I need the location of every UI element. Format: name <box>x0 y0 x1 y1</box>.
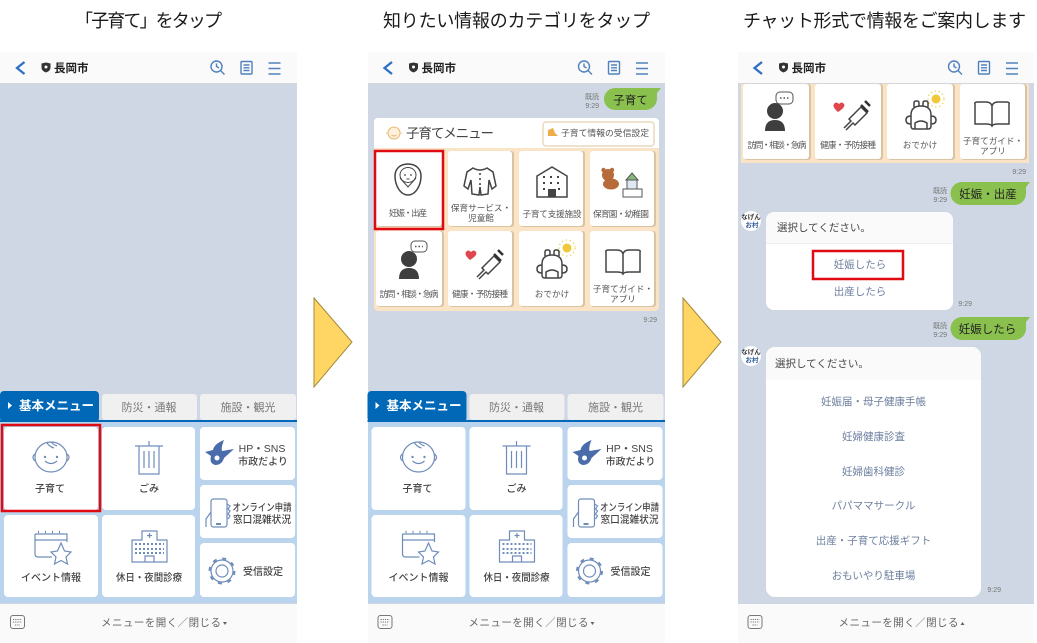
user bubble: 妊娠・出産 <box>933 182 1030 205</box>
arrow: step 2 to step 3 <box>683 298 721 387</box>
card heading: 子育てメニュー <box>406 126 494 141</box>
chat card: 選択してください 2: 選択してください。 <box>775 357 869 370</box>
user bubble: 子育て: 9:29 <box>585 103 599 110</box>
menu button: オンライン申請 窓口混雑状況: 窓口混雑状況 <box>233 513 291 526</box>
menu button: イベント情報 <box>372 515 466 597</box>
menu button: HP・SNS 市政だより <box>568 427 662 480</box>
phone 1 menu tabs: 防災・通報 <box>122 400 176 414</box>
category: 保育園・幼稚園: 保育園・幼稚園 <box>593 208 649 219</box>
user bubble: 妊娠・出産: 既読 <box>933 186 947 195</box>
chat card: 選択してください 1: 出産したら <box>834 285 886 298</box>
category: 健康・予防接種: 健康・予防接種 <box>820 139 876 150</box>
category: 子育てガイド・アプリ <box>590 231 656 307</box>
category: 子育てガイド・アプリ: アプリ <box>610 294 636 304</box>
category: 訪問・相談・急病: 訪問・相談・急病 <box>380 288 439 299</box>
phone 1 footer bar: メニューを開く／閉じる <box>101 617 221 629</box>
category: 訪問・相談・急病 <box>743 84 811 160</box>
bot avatar: お村 <box>746 220 759 229</box>
menu button: HP・SNS 市政だより <box>200 427 295 480</box>
panel: phone 1 <box>0 52 297 643</box>
chat card: 選択してください 1: 妊娠したら <box>834 258 886 271</box>
menu button: 受信設定: 受信設定 <box>610 565 650 578</box>
phone 2 footer bar: メニューを開く／閉じる <box>468 617 588 629</box>
chat card: 選択してください 2: 妊婦歯科健診 <box>842 465 905 478</box>
phone 2 header bar <box>368 52 665 84</box>
category: 健康・予防接種: 健康・予防接種 <box>452 288 508 299</box>
category: 子育て支援施設 <box>519 151 585 227</box>
category: おでかけ <box>519 231 585 307</box>
phone 2 menu tabs: 基本メニュー <box>386 398 462 413</box>
category: 保育サービス・児童館: 保育サービス・ <box>451 202 511 213</box>
menu button: HP・SNS 市政だより: 市政だより <box>606 455 655 468</box>
menu button: 子育て: 子育て <box>35 482 65 495</box>
category: 子育てガイド・アプリ: 子育てガイド・ <box>963 135 1023 146</box>
category: 健康・予防接種 <box>815 84 883 160</box>
panel: phone 3 <box>738 52 1034 643</box>
phone 2 footer bar <box>368 604 665 643</box>
phone 1 header bar: 長岡市 <box>54 61 89 75</box>
arrow: step 1 to step 2 <box>314 298 352 387</box>
phone 3 header bar <box>738 52 1034 84</box>
menu button: イベント情報: イベント情報 <box>388 571 448 584</box>
category: 子育てガイド・アプリ: アプリ <box>980 146 1006 156</box>
menu button: 受信設定 <box>200 543 295 597</box>
category: 妊娠・出産: 妊娠・出産 <box>389 207 427 218</box>
category: 子育て支援施設: 子育て支援施設 <box>522 208 582 219</box>
user bubble: 妊娠したら <box>933 317 1030 340</box>
phone 3 footer bar <box>738 604 1034 643</box>
bot avatar <box>741 346 761 366</box>
phone 3 footer bar: メニューを開く／閉じる <box>838 617 958 629</box>
menu button: 子育て <box>4 427 98 510</box>
menu button: 休日・夜間診療: 休日・夜間診療 <box>484 571 550 584</box>
bot avatar: なげん <box>741 347 761 356</box>
user bubble: 妊娠したら: 9:29 <box>933 332 947 339</box>
menu button: 休日・夜間診療: 休日・夜間診療 <box>116 571 182 584</box>
category: おでかけ: おでかけ <box>903 140 937 150</box>
phone 3 header bar: 長岡市 <box>792 61 826 75</box>
phone 1 menu grid <box>0 422 297 603</box>
button: 子育て情報の受信設定 <box>543 122 654 146</box>
user bubble: 妊娠したら: 既読 <box>933 321 947 330</box>
chat card: 選択してください 1 <box>766 212 953 310</box>
category: 健康・予防接種 <box>448 231 514 307</box>
user bubble: 妊娠・出産: 9:29 <box>933 197 947 204</box>
bot avatar: お村 <box>746 355 759 364</box>
category: 妊娠・出産 <box>376 151 444 227</box>
chat card: 選択してください 1: 選択してください。 <box>777 221 871 234</box>
timestamp: 9:29 <box>958 301 972 308</box>
button: 子育て情報の受信設定: 子育て情報の受信設定 <box>561 127 649 138</box>
menu button: オンライン申請 窓口混雑状況: オンライン申請 <box>600 501 659 514</box>
phone 2 menu tabs <box>368 391 665 422</box>
menu button: オンライン申請 窓口混雑状況: 窓口混雑状況 <box>600 513 658 526</box>
menu button: 受信設定 <box>568 543 662 597</box>
timestamp: 9:29 <box>987 587 1001 594</box>
category: おでかけ <box>887 84 955 160</box>
chat card: 選択してください 2: おもいやり駐車場 <box>832 569 916 582</box>
menu button: 子育て <box>372 427 466 510</box>
heading: step 1: 「子育て」をタップ <box>75 11 222 31</box>
phone 2 menu grid <box>368 422 665 603</box>
user bubble: 妊娠・出産: 妊娠・出産 <box>959 187 1017 201</box>
bot avatar: なげん <box>741 212 761 221</box>
red highlight: 妊娠・出産 <box>375 151 443 229</box>
heading: step 2: 知りたい情報のカテゴリをタップ <box>383 11 650 31</box>
menu button: ごみ <box>102 427 195 510</box>
category: 訪問・相談・急病 <box>376 231 444 307</box>
panel: 子育てメニュー card <box>374 118 659 311</box>
timestamp: 9:29 <box>643 317 657 324</box>
panel: phone 2 <box>368 52 665 643</box>
menu button: 子育て: 子育て <box>402 482 432 495</box>
menu button: HP・SNS 市政だより: HP・SNS <box>239 443 285 455</box>
phone 2 menu tabs: 防災・通報 <box>489 400 544 414</box>
menu button: ごみ <box>470 427 562 510</box>
menu button: オンライン申請 窓口混雑状況 <box>200 485 295 538</box>
menu button: オンライン申請 窓口混雑状況: オンライン申請 <box>232 501 292 514</box>
phone 1 footer bar <box>0 604 297 643</box>
phone 2 header bar: 長岡市 <box>422 61 456 75</box>
category: 保育サービス・児童館 <box>448 151 514 227</box>
menu button: ごみ: ごみ <box>506 482 526 495</box>
menu button: 休日・夜間診療 <box>470 515 562 597</box>
user bubble: 子育て: 既読 <box>585 92 599 101</box>
menu button: ごみ: ごみ <box>139 482 159 495</box>
scrolled category cards <box>741 84 1029 163</box>
user bubble: 子育て: 子育て <box>613 94 648 107</box>
category: 保育園・幼稚園 <box>590 151 656 227</box>
timestamp: 9:29 <box>1012 169 1026 176</box>
menu button: HP・SNS 市政だより: 市政だより <box>238 455 288 468</box>
chat card: 選択してください 2: 妊娠届・母子健康手帳 <box>821 395 926 408</box>
category: 訪問・相談・急病: 訪問・相談・急病 <box>748 139 807 150</box>
red highlight: 子育て <box>2 425 100 511</box>
category: 子育てガイド・アプリ: 子育てガイド・ <box>593 283 653 294</box>
menu button: イベント情報 <box>4 515 98 597</box>
phone 1 menu tabs: 施設・観光 <box>220 400 276 414</box>
menu button: 受信設定: 受信設定 <box>243 565 283 578</box>
chat card: 選択してください 2: 妊婦健康診査 <box>842 430 905 443</box>
phone 1 header bar <box>0 52 297 84</box>
phone 1 menu tabs <box>0 391 297 422</box>
menu button: 休日・夜間診療 <box>102 515 195 597</box>
category: 子育てガイド・アプリ <box>960 84 1027 160</box>
user bubble: 子育て <box>585 88 661 110</box>
category: おでかけ: おでかけ <box>535 289 569 299</box>
bot avatar <box>741 211 761 231</box>
phone 2 menu tabs: 施設・観光 <box>588 400 643 414</box>
menu button: イベント情報: イベント情報 <box>21 571 81 584</box>
user bubble: 妊娠したら: 妊娠したら <box>959 322 1016 336</box>
menu button: オンライン申請 窓口混雑状況 <box>568 485 662 538</box>
red highlight: 妊娠したら <box>813 251 903 279</box>
chat card: 選択してください 2 <box>766 347 981 597</box>
phone 1 menu tabs: 基本メニュー <box>19 398 94 413</box>
chat card: 選択してください 2: パパママサークル <box>832 500 915 512</box>
heading: step 3: チャット形式で情報をご案内します <box>743 11 1026 31</box>
chat card: 選択してください 2: 出産・子育て応援ギフト <box>816 534 931 547</box>
menu button: HP・SNS 市政だより: HP・SNS <box>606 443 653 455</box>
category: 保育サービス・児童館: 児童館 <box>468 212 494 223</box>
